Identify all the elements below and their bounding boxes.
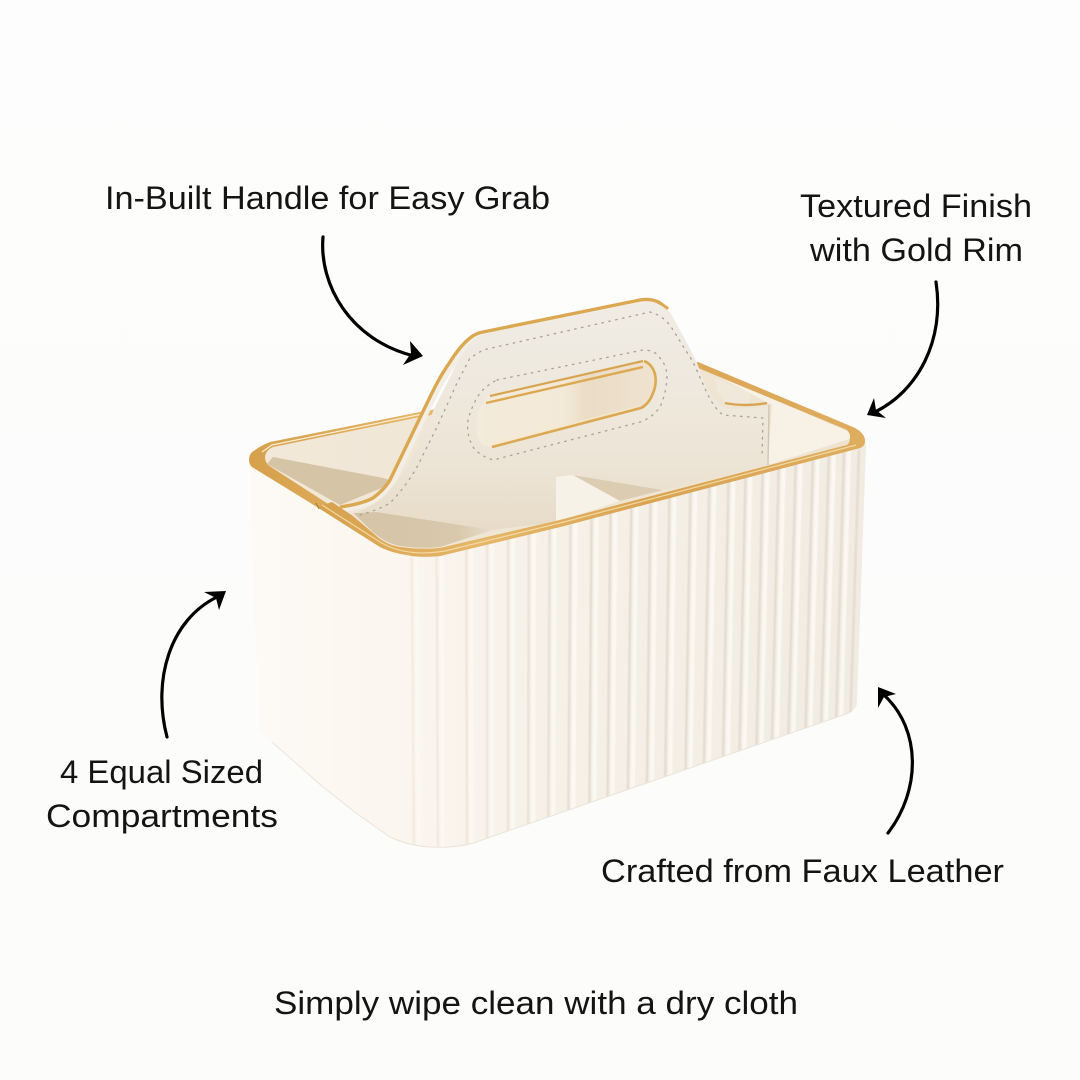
gold rim bbox=[249, 362, 865, 557]
shaded floor: front left bbox=[353, 512, 493, 548]
label: handle: In-Built Handle for Easy Grab bbox=[105, 180, 550, 216]
label: textured finish: Textured Finish bbox=[800, 188, 1032, 224]
arrow: to handle bbox=[323, 237, 423, 365]
label: textured finish: with Gold Rim bbox=[809, 232, 1023, 268]
small back right compartment bbox=[715, 378, 750, 404]
stitching bbox=[360, 312, 763, 515]
gold handle edge bbox=[340, 299, 668, 509]
handle divider panel bbox=[357, 303, 769, 530]
arrow: to body bbox=[878, 687, 912, 833]
right wall of compartment bbox=[710, 372, 850, 465]
back gold tab bbox=[725, 403, 767, 405]
gold rim front edge bbox=[316, 427, 865, 557]
label: textured finish bbox=[800, 188, 1032, 268]
label: compartments: 4 Equal Sized bbox=[60, 754, 263, 790]
cross divider bbox=[556, 475, 620, 522]
handle opening bbox=[477, 361, 656, 447]
label: compartments bbox=[46, 754, 278, 834]
label: faux leather: Crafted from Faux Leather bbox=[601, 853, 1004, 889]
shaded floor: back left bbox=[267, 457, 396, 505]
label: compartments: Compartments bbox=[46, 798, 278, 834]
shaded floor: right bbox=[573, 475, 663, 501]
infographic canvas bbox=[48, 186, 1030, 1020]
label: care instructions: Simply wipe clean with a dry cloth bbox=[274, 985, 798, 1021]
product: ribbed storage caddy bbox=[249, 299, 866, 860]
arrow: to gold rim bbox=[867, 282, 938, 418]
caddy body bbox=[249, 430, 866, 860]
arrow: to compartments bbox=[162, 591, 226, 737]
interior compartments bbox=[265, 368, 850, 549]
